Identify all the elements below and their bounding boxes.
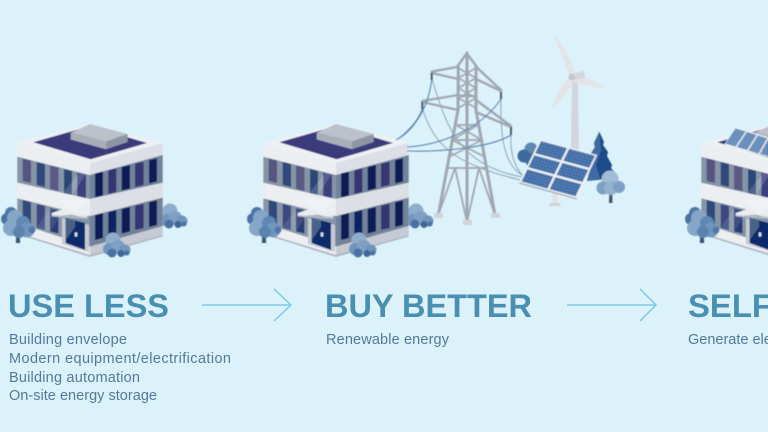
heading: use less: USE LESS — [8, 288, 169, 324]
bush: front — [103, 232, 130, 258]
pylon footings — [434, 213, 500, 225]
text block: buy better items: Renewable energy — [326, 332, 450, 348]
icon: solar panel stand — [549, 192, 561, 206]
heading: self: SELF — [688, 288, 768, 324]
icon: wind turbine — [552, 33, 608, 150]
icon: transmission pylon — [422, 53, 511, 222]
tree: front left — [685, 207, 720, 243]
text block: use less items: Modern equipment/electrification — [9, 351, 231, 367]
office building — [701, 124, 768, 257]
bush: front — [349, 232, 376, 258]
bush: right of building — [160, 204, 188, 228]
rooftop solar panels — [724, 127, 768, 157]
text block: use less items: Building envelope — [9, 332, 127, 348]
arrow: use less to buy better — [202, 289, 291, 321]
text block: use less items — [9, 332, 231, 404]
office building — [263, 124, 409, 257]
text layer — [8, 288, 768, 404]
building: use less — [1, 124, 188, 258]
tree: front left — [247, 207, 282, 243]
icon: pine tree — [586, 132, 617, 181]
wires — [422, 78, 523, 180]
office building — [17, 124, 163, 257]
building: self — [685, 124, 768, 257]
bush: right of building — [406, 204, 434, 228]
insulators — [422, 73, 511, 135]
building: buy better — [247, 124, 434, 258]
heading: buy better: BUY BETTER — [325, 288, 532, 324]
icon: bush behind solar panel — [518, 142, 539, 167]
text block: use less items: On-site energy storage — [9, 388, 157, 404]
icon: tree beside solar panel — [596, 170, 625, 203]
power lines to building — [396, 80, 511, 151]
arrow: buy better to self — [567, 289, 656, 321]
icon: solar panel — [519, 139, 597, 200]
illustration layer — [1, 33, 768, 258]
tree: front left — [1, 207, 36, 243]
text block: use less items: Building automation — [9, 370, 140, 386]
